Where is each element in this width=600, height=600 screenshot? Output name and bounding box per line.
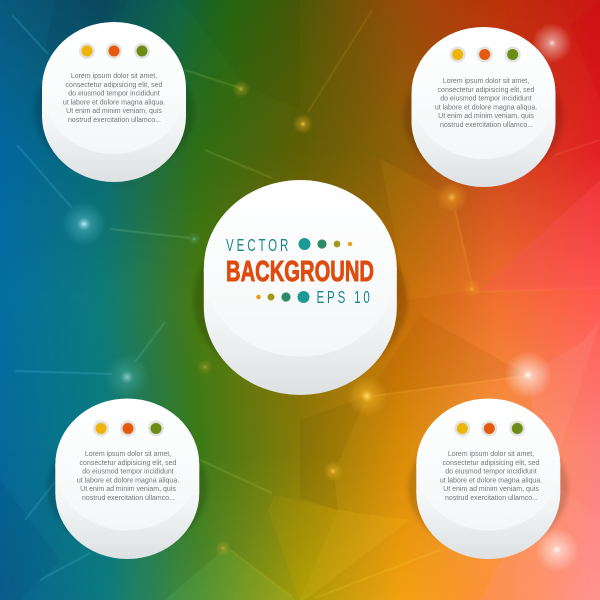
lorem text: consectetur adipisicing elit, sed xyxy=(80,460,177,467)
lorem text: consectetur adipisicing elit, sed xyxy=(438,87,535,94)
disc: top left xyxy=(34,22,194,182)
disc: center xyxy=(193,180,407,395)
lorem text: Lorem ipsum dolor sit amet, xyxy=(85,451,171,458)
lorem text: ut labore et dolore magna aliqua. xyxy=(435,104,537,111)
lorem text: ut labore et dolore magna aliqua. xyxy=(440,477,542,484)
lorem text: nostrud exercitation ullamco... xyxy=(68,117,161,124)
lorem text: Ut enim ad minim veniam, quis xyxy=(443,486,539,493)
lorem text: nostrud exercitation ullamco... xyxy=(440,122,533,129)
lorem text: consectetur adipisicing elit, sed xyxy=(66,82,163,89)
disc: bottom right xyxy=(408,398,568,559)
lorem text: do eiusmod tempor incididunt xyxy=(82,469,174,476)
lorem text: Lorem ipsum dolor sit amet, xyxy=(71,73,157,80)
status dots xyxy=(454,420,525,436)
lorem text: ut labore et dolore magna aliqua. xyxy=(63,99,165,106)
lorem text: Lorem ipsum dolor sit amet, xyxy=(448,451,534,458)
light sparkles xyxy=(62,23,579,572)
lorem text: ut labore et dolore magna aliqua. xyxy=(77,477,179,484)
lorem text: do eiusmod tempor incididunt xyxy=(440,96,532,103)
lorem text: Lorem ipsum dolor sit amet, xyxy=(443,78,529,85)
status dots xyxy=(93,420,164,436)
title dots: upper row xyxy=(298,238,352,250)
disc: bottom left xyxy=(47,398,207,559)
title: BACKGROUND: BACKGROUND xyxy=(226,256,374,288)
title: EPS 10: EPS 10 xyxy=(316,289,373,308)
title: VECTOR: VECTOR xyxy=(226,237,291,256)
lorem text: nostrud exercitation ullamco... xyxy=(445,495,538,502)
lorem text: Ut enim ad minim veniam, quis xyxy=(66,108,162,115)
lorem text: do eiusmod tempor incididunt xyxy=(445,469,537,476)
status dots xyxy=(79,43,150,59)
lorem text: Ut enim ad minim veniam, quis xyxy=(80,486,176,493)
lorem text: Ut enim ad minim veniam, quis xyxy=(438,113,534,120)
lorem text: do eiusmod tempor incididunt xyxy=(68,91,160,98)
disc: top right xyxy=(404,27,564,187)
status dots xyxy=(450,46,521,62)
lorem text: consectetur adipisicing elit, sed xyxy=(443,460,540,467)
lorem text: nostrud exercitation ullamco... xyxy=(82,495,175,502)
title dots: lower row xyxy=(256,291,310,303)
